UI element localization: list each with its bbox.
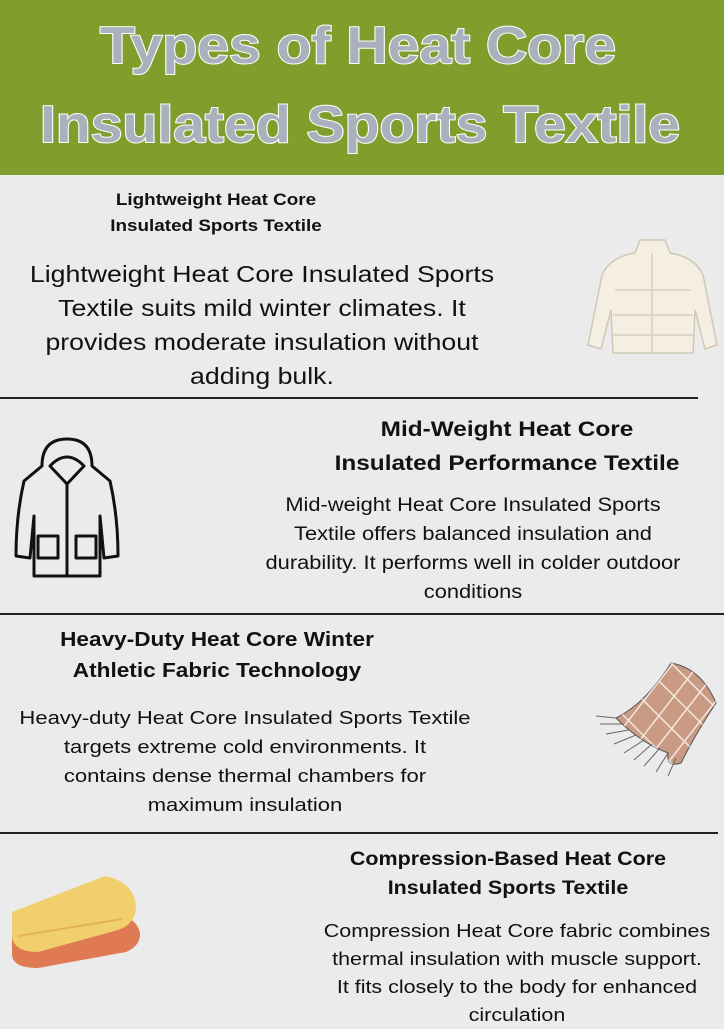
section 3 heading: Heavy-Duty Heat Core Winter xyxy=(60,629,374,651)
section 1 body xyxy=(30,261,494,389)
section 1 body: Lightweight Heat Core Insulated Sports xyxy=(30,261,494,287)
icon: plaid blanket xyxy=(596,662,716,776)
section 3 heading xyxy=(60,629,374,682)
title xyxy=(40,17,680,154)
section 1 heading xyxy=(110,190,322,235)
section 4 body: thermal insulation with muscle support. xyxy=(332,948,702,969)
section 1 body: Textile suits mild winter climates. It xyxy=(58,295,466,321)
icon: hooded coat outline xyxy=(14,438,120,578)
section 3 body: contains dense thermal chambers for xyxy=(64,765,426,786)
section 4 body xyxy=(324,920,710,1025)
section 3 body: maximum insulation xyxy=(148,794,342,815)
section 1 body: adding bulk. xyxy=(190,363,334,389)
section 4 heading: Compression-Based Heat Core xyxy=(350,849,666,870)
section 1 heading: Insulated Sports Textile xyxy=(110,216,322,235)
section 4 heading: Insulated Sports Textile xyxy=(388,878,628,899)
title: Types of Heat Core xyxy=(100,17,616,75)
section 2 heading: Insulated Performance Textile xyxy=(335,452,679,475)
section 4 body: Compression Heat Core fabric combines xyxy=(324,920,710,941)
icon: puffer jacket xyxy=(587,239,718,354)
section 4 body: It fits closely to the body for enhanced xyxy=(337,976,697,997)
section 3 body xyxy=(19,707,471,815)
section 2 body: Mid-weight Heat Core Insulated Sports xyxy=(285,495,661,516)
section 4 body: circulation xyxy=(469,1004,565,1025)
section 3 body: Heavy-duty Heat Core Insulated Sports Textile xyxy=(19,707,471,728)
section 3 heading: Athletic Fabric Technology xyxy=(73,660,361,682)
section 2 heading xyxy=(335,418,679,475)
section 1 body: provides moderate insulation without xyxy=(45,329,479,355)
section 2 body: Textile offers balanced insulation and xyxy=(294,524,652,545)
title: Insulated Sports Textile xyxy=(40,96,680,154)
section 2 body: conditions xyxy=(424,582,522,603)
section 4 heading xyxy=(350,849,666,899)
title banner xyxy=(0,0,724,175)
icon: folded towels xyxy=(12,876,140,968)
section 2 body: durability. It performs well in colder outdoor xyxy=(266,553,680,574)
section 3 body: targets extreme cold environments. It xyxy=(64,736,426,757)
section 1 heading: Lightweight Heat Core xyxy=(116,190,316,209)
section 2 body xyxy=(266,495,680,603)
section 2 heading: Mid-Weight Heat Core xyxy=(381,418,633,441)
